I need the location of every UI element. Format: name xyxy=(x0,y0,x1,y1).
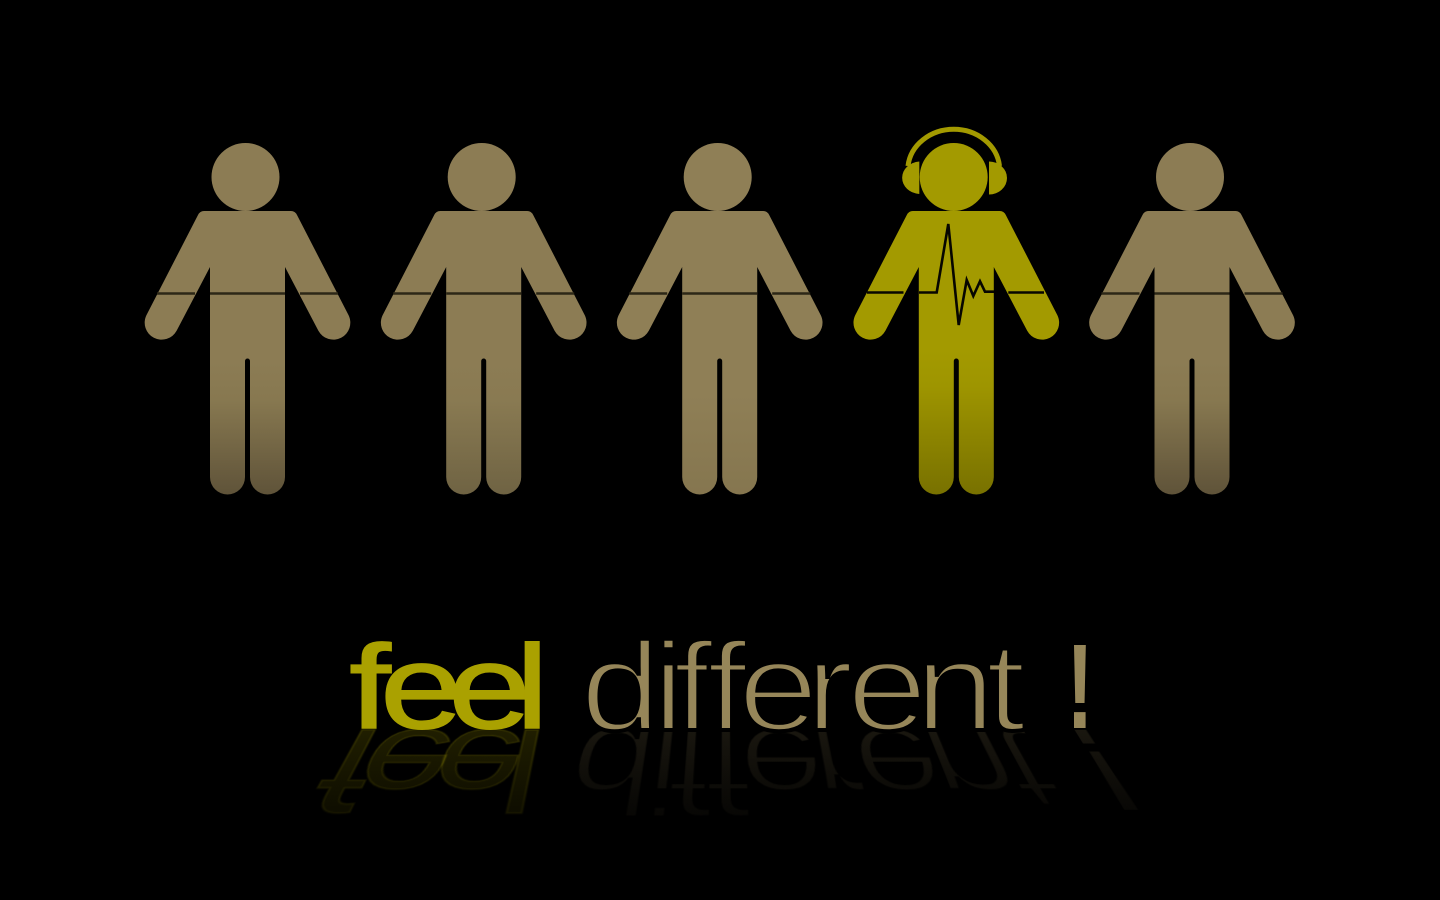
head xyxy=(684,143,752,211)
slogan xyxy=(349,616,1094,757)
heartbeat line xyxy=(867,224,1044,325)
figure 5 xyxy=(1089,143,1295,494)
head xyxy=(212,143,280,211)
figure 3 xyxy=(617,143,823,494)
figure 1 xyxy=(145,143,350,494)
body xyxy=(381,211,587,494)
waist line xyxy=(629,292,810,295)
word: different: different xyxy=(580,616,1026,757)
reflection of word: feel xyxy=(316,729,540,814)
reflection of exclamation mark xyxy=(1074,730,1136,810)
waist line xyxy=(157,292,338,295)
word: feel: feel xyxy=(349,620,549,754)
head xyxy=(448,143,516,211)
body xyxy=(145,211,350,494)
body xyxy=(617,211,823,494)
head xyxy=(1156,143,1224,211)
left ear cup xyxy=(902,162,919,194)
exclamation mark: ! xyxy=(1066,618,1094,754)
reflection of word: different xyxy=(579,731,1056,811)
figure 2 xyxy=(381,143,587,494)
right ear cup xyxy=(989,162,1007,194)
figure 4: highlighted listener with headphones xyxy=(853,129,1059,494)
waist line xyxy=(393,292,574,295)
headband xyxy=(908,129,1000,166)
body xyxy=(853,211,1059,494)
waist line xyxy=(1102,292,1282,295)
headphones xyxy=(902,129,1007,194)
head xyxy=(920,143,988,211)
body xyxy=(1089,211,1295,494)
